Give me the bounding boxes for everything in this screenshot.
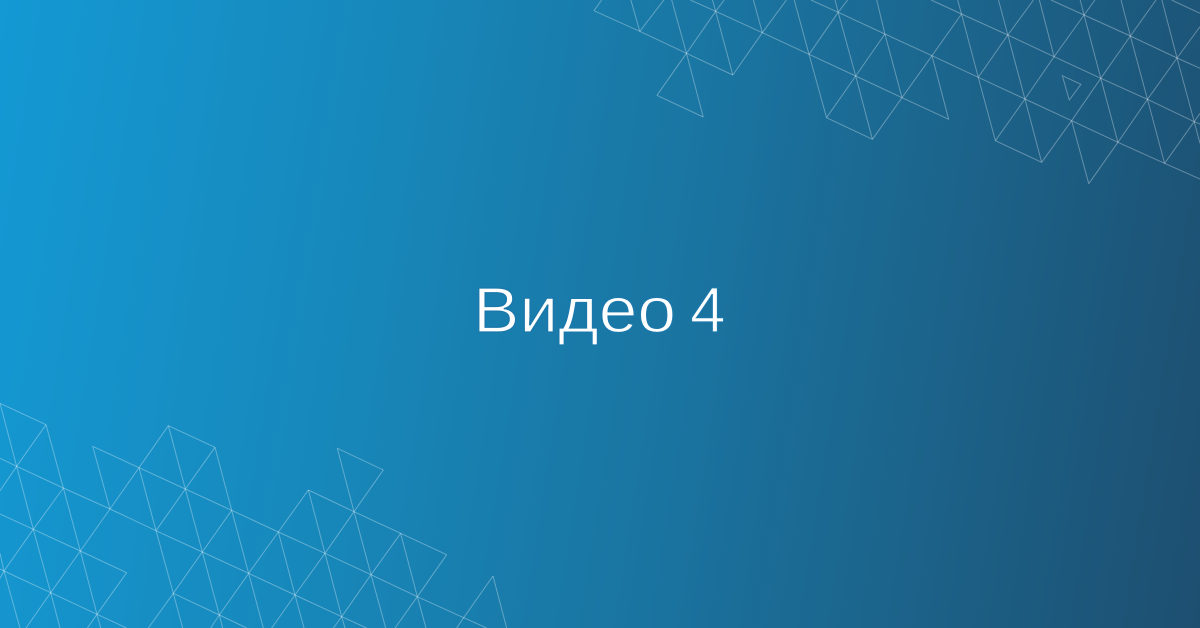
icon: small triangle	[1062, 76, 1081, 100]
pattern: triangle lattice top right	[594, 0, 1200, 184]
title: Видео	[473, 274, 676, 346]
title: 4	[690, 274, 726, 346]
pattern: triangle lattice bottom left	[0, 403, 507, 628]
